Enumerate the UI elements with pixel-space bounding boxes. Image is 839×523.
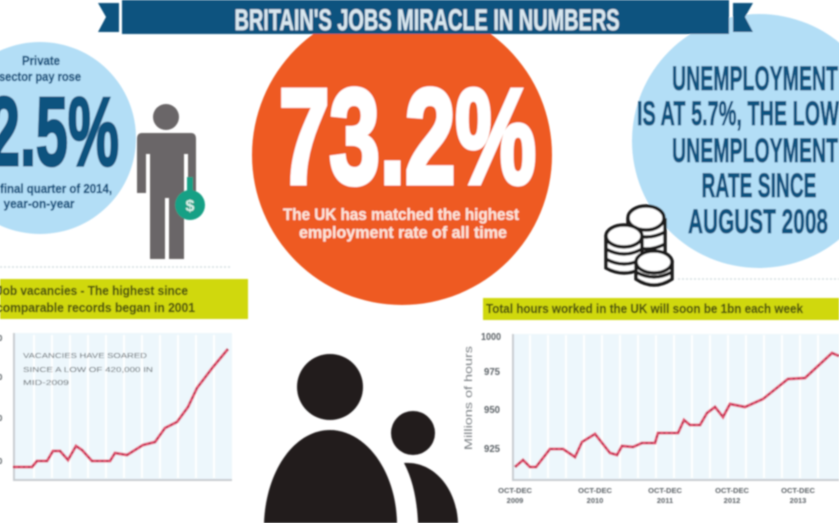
x axis labels: OCT-DEC <box>578 486 612 495</box>
panel: total hours heading <box>483 298 839 320</box>
x axis labels: OCT-DEC <box>715 486 749 495</box>
panel: headline employment rate: employment rate of all time <box>299 223 507 242</box>
panel: headline employment rate: The UK has matched the highest <box>283 205 519 224</box>
panel: unemployment <box>632 14 839 268</box>
icon: person with money bag: $ <box>186 198 195 215</box>
chart annotation: MID-2009 <box>23 378 69 387</box>
x axis labels: 2009 <box>507 496 523 505</box>
title banner <box>98 0 753 37</box>
chart annotation <box>23 351 153 387</box>
panel: private sector pay: year-on-year <box>4 196 74 211</box>
x axis labels: 2013 <box>790 496 806 505</box>
y axis labels <box>481 332 501 455</box>
panel: headline employment rate: 73.2% <box>279 61 536 212</box>
icon: coins <box>606 206 672 285</box>
panel: job vacancies heading <box>0 279 248 319</box>
panel: total hours heading: Total hours worked in the UK will soon be 1bn each week <box>486 301 804 316</box>
icon: person with money bag <box>137 104 205 259</box>
chart annotation: VACANCIES HAVE SOARED <box>23 351 148 360</box>
y axis title: Millions of hours <box>463 345 475 450</box>
y axis labels: 925 <box>484 444 500 455</box>
y axis labels: 950 <box>484 405 500 416</box>
y axis labels: 975 <box>484 367 500 378</box>
x axis labels: OCT-DEC <box>781 486 815 495</box>
icon: large and small person silhouettes <box>264 354 458 523</box>
chart: hours worked line chart <box>463 332 839 505</box>
panel: private sector pay: sector pay rose <box>0 69 81 84</box>
panel: private sector pay: Private <box>22 53 60 68</box>
x axis labels: 2010 <box>587 496 603 505</box>
panel: headline employment rate <box>252 5 552 305</box>
panel: private sector pay <box>0 42 136 234</box>
chart: vacancies line chart <box>13 333 232 480</box>
x axis labels <box>498 486 815 505</box>
x axis labels: OCT-DEC <box>648 486 682 495</box>
panel: job vacancies heading: comparable records began in 2001 <box>0 300 195 315</box>
x axis labels: 2012 <box>724 496 740 505</box>
panel: private sector pay: final quarter of 2014, <box>0 181 112 196</box>
left chart y ticks <box>0 334 3 466</box>
y axis labels: 1000 <box>481 332 501 343</box>
chart annotation: SINCE A LOW OF 420,000 IN <box>23 365 153 374</box>
x axis labels: OCT-DEC <box>498 486 532 495</box>
panel: job vacancies heading: Job vacancies - The highest since <box>0 283 188 298</box>
x axis labels: 2011 <box>657 496 673 505</box>
title banner: BRITAIN'S JOBS MIRACLE IN NUMBERS <box>234 4 620 37</box>
